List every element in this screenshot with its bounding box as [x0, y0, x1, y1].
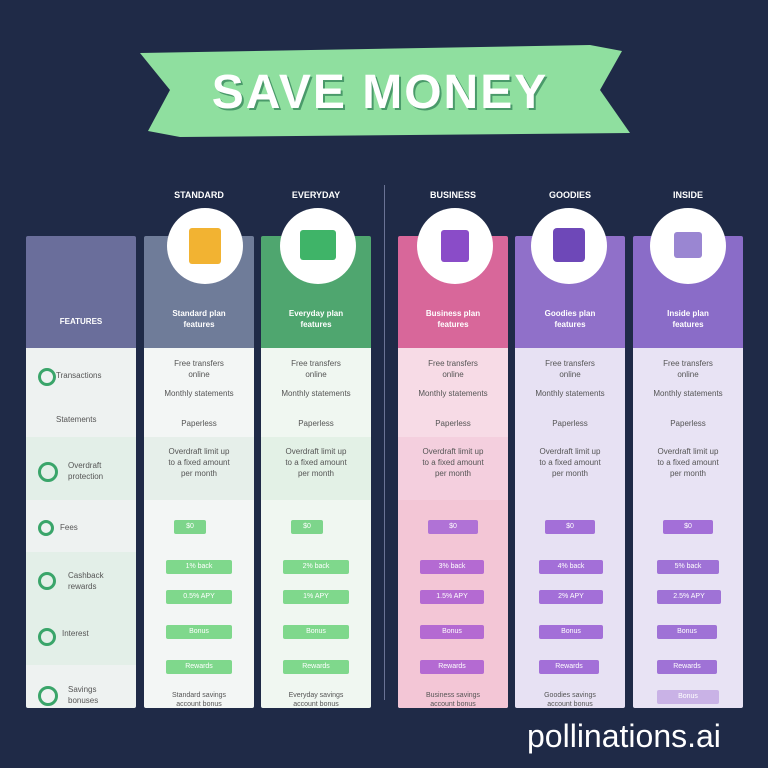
panel: column 3: Bonus: [442, 628, 462, 635]
panel: label column: rewards: [68, 582, 96, 591]
divider: [384, 185, 385, 700]
panel: label column: bonuses: [68, 696, 98, 705]
panel: column 2: 2% back: [303, 563, 329, 570]
panel: label column: Savings: [68, 685, 96, 694]
panel: column 1: online: [188, 370, 210, 379]
panel: label column: Overdraft: [68, 461, 101, 470]
panel: column 3: to a fixed amount: [422, 458, 484, 467]
panel: column 1: $0: [186, 523, 194, 530]
panel: column 3: 1.5% APY: [436, 593, 468, 600]
panel: label column: Transactions: [56, 371, 102, 380]
panel: column 4: Rewards: [555, 663, 583, 670]
text: EVERYDAY: [292, 190, 340, 200]
panel: column 1: Paperless: [181, 419, 217, 428]
text: BUSINESS: [430, 190, 476, 200]
title: SAVE MONEY: [212, 66, 548, 119]
column titles: STANDARD: [174, 190, 224, 200]
panel: column 5: Monthly statements: [653, 389, 723, 398]
panel: column 3: 3% back: [439, 563, 465, 570]
panel: column 3: Overdraft limit up: [423, 447, 483, 456]
panel: column 5: Bonus: [677, 628, 697, 635]
panel: column 4: $0: [566, 523, 574, 530]
icon: purple 2: [531, 208, 607, 284]
panel: column 3: Monthly statements: [418, 389, 488, 398]
panel: column 5: online: [677, 370, 699, 379]
panel: column 3: features: [437, 320, 469, 329]
panel: column 1: account bonus: [176, 701, 222, 708]
panel: column 2: Monthly statements: [281, 389, 351, 398]
panel: column 2: Rewards: [302, 663, 330, 670]
panel: label column: Interest: [62, 629, 89, 638]
panel: label column: FEATURES: [60, 317, 102, 326]
panel: column 1: features: [183, 320, 215, 329]
panel: label column: Cashback: [68, 571, 104, 580]
panel: label column: [26, 236, 136, 708]
panel: label column: Fees: [60, 523, 78, 532]
panel: column 4: Goodies savings: [544, 692, 596, 699]
panel: column 4: [515, 236, 625, 708]
panel: column 4: online: [559, 370, 581, 379]
panel: column 2: $0: [303, 523, 311, 530]
panel: column 2: per month: [298, 469, 334, 478]
panel: column 2: Paperless: [298, 419, 334, 428]
panel: column 4: 2% APY: [558, 593, 584, 600]
panel: column 5: $0: [684, 523, 692, 530]
panel: column 3: per month: [435, 469, 471, 478]
panel: column 1: per month: [181, 469, 217, 478]
panel: column 4: Free transfers: [545, 359, 595, 368]
panel: column 3: $0: [449, 523, 457, 530]
icon: yellow: [167, 208, 243, 284]
panel: column 4: Paperless: [552, 419, 588, 428]
panel: column 5: Paperless: [670, 419, 706, 428]
panel: column 4: Goodies plan: [545, 309, 595, 318]
icon: purple 3: [650, 208, 726, 284]
panel: column 5: Free transfers: [663, 359, 713, 368]
panel: column 4: account bonus: [547, 701, 593, 708]
watermark: pollinations.ai: [527, 718, 721, 754]
panel: column 1: Bonus: [189, 628, 209, 635]
panel: column 3: [398, 236, 508, 708]
panel: label column: Statements: [56, 415, 96, 424]
panel: column 4: to a fixed amount: [539, 458, 601, 467]
panel: column 4: Overdraft limit up: [540, 447, 600, 456]
panel: column 5: 2.5% APY: [673, 593, 705, 600]
icon: purple 1: [417, 208, 493, 284]
panel: column 1: Standard savings: [172, 692, 226, 699]
text: INSIDE: [673, 190, 703, 200]
panel: column 2: Everyday plan: [289, 309, 343, 318]
panel: column 4: features: [554, 320, 586, 329]
panel: column 3: Business plan: [426, 309, 480, 318]
panel: column 5: Inside plan: [667, 309, 709, 318]
panel: column 2: features: [300, 320, 332, 329]
panel: column 1: Free transfers: [174, 359, 224, 368]
panel: column 4: 4% back: [558, 563, 584, 570]
panel: column 2: Free transfers: [291, 359, 341, 368]
panel: column 3: Free transfers: [428, 359, 478, 368]
icon: green: [280, 208, 356, 284]
panel: column 5: 5% back: [675, 563, 701, 570]
panel: column 5: Bonus: [678, 693, 698, 700]
panel: column 1: 1% back: [186, 563, 212, 570]
panel: column 2: to a fixed amount: [285, 458, 347, 467]
panel: column 4: per month: [552, 469, 588, 478]
panel: column 1: 0.5% APY: [183, 593, 215, 600]
panel: column 2: Bonus: [306, 628, 326, 635]
panel: column 1: [144, 236, 254, 708]
panel: column 5: [633, 236, 743, 708]
panel: column 5: Rewards: [673, 663, 701, 670]
text: GOODIES: [549, 190, 591, 200]
panel: label column: protection: [68, 472, 103, 481]
panel: column 3: online: [442, 370, 464, 379]
panel: column 3: account bonus: [430, 701, 476, 708]
panel: column 2: account bonus: [293, 701, 339, 708]
panel: column 3: Rewards: [438, 663, 466, 670]
panel: column 2: Overdraft limit up: [286, 447, 346, 456]
panel: column 2: 1% APY: [303, 593, 329, 600]
panel: column 5: features: [672, 320, 704, 329]
panel: column 5: to a fixed amount: [657, 458, 719, 467]
panel: column 4: Bonus: [561, 628, 581, 635]
panel: column 3: Business savings: [426, 692, 480, 699]
panel: column 1: Monthly statements: [164, 389, 234, 398]
panel: column 1: Rewards: [185, 663, 213, 670]
panel: column 5: per month: [670, 469, 706, 478]
panel: column 2: [261, 236, 371, 708]
panel: column 1: to a fixed amount: [168, 458, 230, 467]
title ribbon: [140, 45, 630, 137]
panel: column 1: Standard plan: [172, 309, 226, 318]
panel: column 4: Monthly statements: [535, 389, 605, 398]
panel: column 5: Overdraft limit up: [658, 447, 718, 456]
panel: column 2: Everyday savings: [289, 692, 343, 699]
panel: column 3: Paperless: [435, 419, 471, 428]
panel: column 2: online: [305, 370, 327, 379]
panel: column 1: Overdraft limit up: [169, 447, 229, 456]
